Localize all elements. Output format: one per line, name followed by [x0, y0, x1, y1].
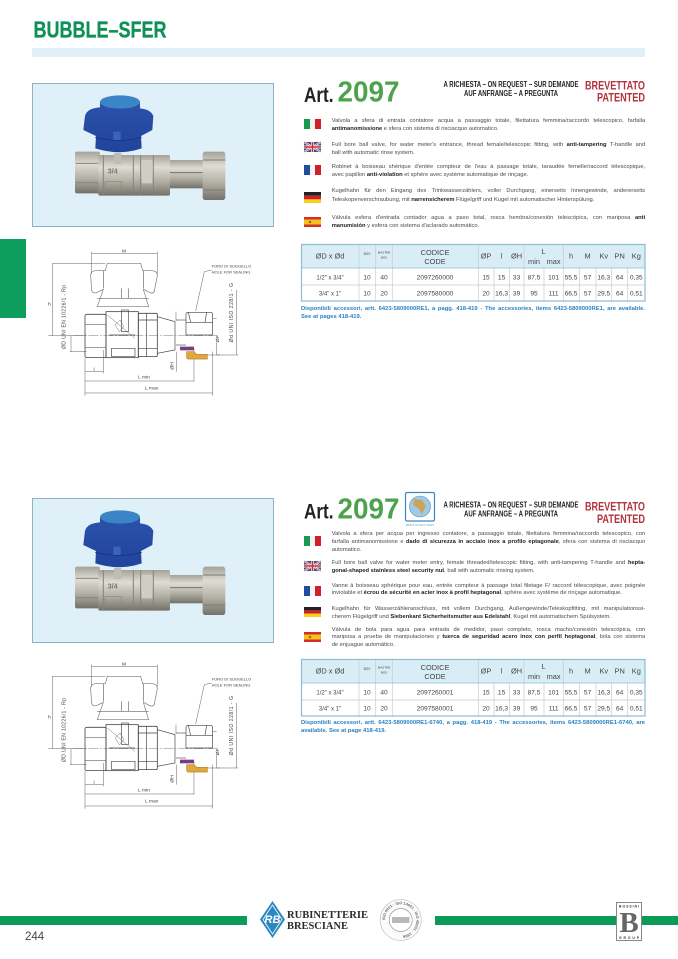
- technical drawing with dimensions: FORO DI SUGGELLO: [212, 263, 251, 268]
- table: dimensions and codes: 3/4" x 1": [319, 291, 341, 297]
- table: dimensions and codes: 55,5: [565, 689, 578, 696]
- text: Spanish description: Válvula esfera d'entrada contador agua a paso total, rosca hembra/conexión telescópica, con mariposa anti: [332, 215, 645, 221]
- text: Italian description: automatico.: [332, 547, 361, 553]
- table: dimensions and codes: 15: [498, 689, 506, 696]
- table: dimensions and codes: max: [547, 257, 561, 266]
- table: dimensions and codes: 0,35: [630, 274, 643, 281]
- description: German: [304, 188, 645, 203]
- icon: French flag: [304, 165, 321, 175]
- table: dimensions and codes: min: [528, 257, 540, 266]
- table: dimensions and codes: 66,5: [565, 705, 578, 712]
- technical drawing with dimensions: ØD UNI EN 10226/1 - Rp: [62, 285, 68, 349]
- panel: article 2097 standard: [32, 77, 646, 396]
- article heading with multi utility badge: AUF ANFRANGE – A PREGUNTA: [464, 510, 558, 518]
- table: dimensions and codes: L: [541, 662, 546, 671]
- table: dimensions and codes: 0,51: [630, 290, 643, 297]
- article heading: PATENTED: [597, 91, 645, 105]
- table: dimensions and codes: 95: [530, 290, 538, 297]
- text: French description: inviolable et écrou de sécurité en acier inox à profil heptagonal, sphère avec système de rinçage automatique.: [332, 590, 622, 596]
- table: dimensions and codes: h: [569, 666, 573, 676]
- technical drawing with dimensions: Ød UNI ISO 228/1 - G: [229, 696, 235, 755]
- table: dimensions and codes: 16,3: [495, 290, 508, 297]
- description: English: [304, 142, 645, 156]
- text: Spanish description: mariposa a prueba de manipulaciones y tuerca de seguridad acero inox con perfil heptagonal, bola con sistema: [332, 634, 645, 640]
- note: accessories: See at pages 418-419.: [301, 314, 361, 320]
- technical drawing with dimensions: L max: [145, 386, 159, 392]
- table: dimensions and codes: M: [585, 252, 591, 260]
- table: dimensions and codes: 20: [482, 705, 490, 712]
- technical drawing with dimensions: l: [93, 367, 95, 373]
- title: BUBBLE–SFER: [34, 16, 167, 42]
- description: Spanish: [304, 215, 645, 229]
- product photo: blue T-handle ball valve: 3/4: [108, 166, 119, 175]
- logo: Rubinetterie Bresciane: RB: [265, 914, 280, 926]
- technical drawing with dimensions: Ød UNI ISO 228/1 - G: [229, 283, 235, 342]
- table: dimensions and codes: 57: [584, 274, 592, 281]
- table: dimensions and codes: 3/4" x 1": [319, 706, 341, 712]
- note: accessories: available. See at page 418-419.: [301, 728, 386, 734]
- article heading: A RICHIESTA – ON REQUEST – SUR DEMANDE: [444, 80, 578, 89]
- icon: Italian flag: [304, 119, 321, 129]
- technical drawing with dimensions: ØP: [215, 334, 221, 342]
- footer: right green bar: [435, 916, 678, 925]
- text: German description: Kugelhahn für den Eingang des Trinkwasserzählers, voller Durchgang, einerseits Innengewinde, andererseits: [332, 188, 645, 194]
- table: dimensions and codes: 55,5: [565, 274, 578, 281]
- table: dimensions and codes: BOX: [381, 670, 387, 674]
- table: dimensions and codes: 10: [363, 705, 371, 712]
- table: dimensions and codes: BOX: [364, 252, 371, 256]
- icon: French flag: [304, 586, 321, 596]
- table: dimensions and codes: 2097260001: [417, 689, 454, 696]
- table: dimensions and codes: l: [501, 666, 503, 676]
- table: dimensions and codes: 16,3: [597, 274, 611, 281]
- article heading with multi utility badge: PATENTED: [597, 512, 645, 526]
- seal: ISO certification: ISO 9001 · ISO 14001 · ISO 45001 · 1996: [382, 902, 419, 938]
- description: Italian: [304, 531, 645, 553]
- article heading: BREVETTATO: [585, 78, 645, 92]
- text: Spanish description: Válvula de bola para agua para entrada de medidor, paso completo, rosca macho/conexión telescópica, con: [332, 627, 645, 633]
- icon: UK flag: [304, 560, 322, 572]
- text: German description: [332, 188, 645, 203]
- table: dimensions and codes: l: [501, 252, 503, 260]
- text: German description: Kugelhahn für Wasserzähleranschluss, mit vollem Durchgang, Außengewinde/Teleskopfitting, mit manipulationssi-: [332, 606, 645, 612]
- table: dimensions and codes: L: [541, 247, 546, 256]
- product photo: blue T-handle ball valve: [32, 498, 274, 643]
- text: Spanish description: [332, 627, 645, 649]
- table: dimensions and codes: PN: [615, 252, 625, 260]
- logo: Bossini Group: BOSSINI: [619, 904, 639, 908]
- table: dimensions and codes: BOX: [364, 667, 371, 671]
- table: dimensions and codes: 2097580000: [417, 290, 454, 297]
- text: Italian description: [332, 531, 645, 553]
- table: dimensions and codes: ØH: [511, 666, 522, 676]
- table: dimensions and codes: ØD x Ød: [316, 666, 344, 676]
- table: dimensions and codes: 10: [363, 274, 371, 281]
- table: dimensions and codes: 101: [548, 274, 559, 281]
- table: dimensions and codes: Kv: [599, 252, 608, 260]
- table: dimensions and codes: 111: [549, 705, 559, 712]
- technical drawing with dimensions: HOLE FOR SEALING: [212, 269, 250, 274]
- table: dimensions and codes: 10: [363, 689, 371, 696]
- logo: Rubinetterie Bresciane: RUBINETTERIE: [287, 910, 368, 921]
- table: dimensions and codes: ØD x Ød: [316, 252, 344, 260]
- technical drawing with dimensions: [48, 661, 251, 809]
- table: dimensions and codes: 1/2" x 3/4": [316, 275, 344, 281]
- table: dimensions and codes: CODE: [424, 257, 446, 266]
- article heading with multi utility badge: MULTI UTILITY ONLY: [406, 523, 434, 527]
- text: English description: Full bore ball valve, for water meter's entrance, thread female/telescopic fitting, with anti-tampering T-handle and: [332, 142, 645, 148]
- table: dimensions and codes: 57: [584, 290, 592, 297]
- table: dimensions and codes: 87,5: [528, 274, 541, 281]
- table: dimensions and codes: 20: [482, 290, 490, 297]
- table: dimensions and codes: 33: [513, 274, 521, 281]
- text: French description: Vanne à boisseau sphérique pour eau, entrée compteur à passage total filetage F/ raccord télescopique, avec poignée: [332, 582, 645, 588]
- panel: article 2097 with security nut: h: [48, 715, 51, 721]
- table: dimensions and codes: 0,51: [630, 705, 643, 712]
- text: English description: [332, 560, 645, 574]
- table: dimensions and codes: 15: [498, 274, 506, 281]
- text: English description: [332, 142, 645, 156]
- table: dimensions and codes: PN: [615, 666, 625, 676]
- article heading with multi utility badge: [304, 492, 645, 527]
- description: Spanish: [304, 627, 646, 648]
- technical drawing with dimensions: FORO DI SUGGELLO: [212, 676, 251, 681]
- table: dimensions and codes: 20: [380, 705, 388, 712]
- table: dimensions and codes: [300, 244, 646, 302]
- article heading with multi utility badge: A RICHIESTA – ON REQUEST – SUR DEMANDE: [444, 500, 578, 510]
- text: Italian description: antimanomissione e sfera con sistema di risciacquo automatico.: [332, 126, 499, 132]
- table: dimensions and codes: 66,5: [565, 290, 578, 297]
- text: Spanish description: manumisión y esfera con sistema d'aclarado automático.: [332, 223, 479, 229]
- page number: 244: [25, 931, 44, 943]
- table: dimensions and codes: [301, 659, 646, 717]
- logo: Bossini Group: GROUP: [619, 936, 640, 940]
- panel: article 2097 standard: h: [48, 302, 51, 308]
- text: English description: Full bore ball valve for water meter entry, female threaded/telescopic fitting, with anti-tampering T-handle and hepta-: [332, 560, 645, 566]
- table: dimensions and codes: ØH: [511, 252, 522, 260]
- description: German: [304, 606, 645, 620]
- technical drawing with dimensions: ØP: [215, 747, 221, 755]
- article heading: Art.: [304, 84, 334, 107]
- technical drawing with dimensions: L min: [138, 375, 150, 381]
- table: dimensions and codes: 16,3: [495, 705, 508, 712]
- technical drawing with dimensions: M: [122, 661, 126, 667]
- logo: Bossini Group: [616, 902, 642, 941]
- table: dimensions and codes: 29,5: [597, 290, 611, 297]
- header band: [32, 48, 645, 56]
- text: French description: [332, 164, 645, 178]
- article heading with multi utility badge: Art.: [304, 500, 334, 524]
- note: accessories: Disponibili accessori, artt. 6423-5809000RE1-6740, a pagg. 418-419 - The accessories, items 6423-5809000RE1-6740, are: [301, 720, 645, 726]
- table: dimensions and codes: max: [547, 672, 561, 681]
- table: dimensions and codes: CODICE: [421, 248, 449, 257]
- article heading with multi utility badge: BREVETTATO: [585, 499, 645, 513]
- table: dimensions and codes: 87,5: [528, 689, 541, 696]
- table: dimensions and codes: 64: [616, 290, 624, 297]
- technical drawing with dimensions: [48, 248, 251, 396]
- table: dimensions and codes: CODICE: [421, 663, 449, 672]
- technical drawing with dimensions: L min: [138, 788, 150, 794]
- text: English description: ball with automatic rinse system.: [332, 150, 414, 156]
- table: dimensions and codes: 111: [549, 290, 559, 297]
- table: dimensions and codes: 40: [380, 689, 388, 696]
- note: accessories: Disponibili accessori, artt. 6423-5809000RE1, a pagg. 418-419 - The accessories, items 6423-5809000RE1, are available.: [301, 306, 645, 312]
- note: accessories: [301, 306, 645, 320]
- table: dimensions and codes: M: [585, 666, 591, 676]
- logo: Rubinetterie Bresciane: [258, 899, 370, 940]
- article heading: AUF ANFRANGE – A PREGUNTA: [464, 89, 558, 98]
- table: dimensions and codes: 29,5: [597, 705, 611, 712]
- article heading: 2097: [338, 77, 400, 109]
- table: dimensions and codes: h: [569, 252, 573, 260]
- technical drawing with dimensions: ØH: [170, 362, 176, 370]
- description: Italian: [304, 118, 646, 132]
- table: dimensions and codes: 64: [616, 274, 624, 281]
- technical drawing with dimensions: ØD UNI EN 10226/1 - Rp: [62, 698, 68, 762]
- icon: German flag: [304, 192, 321, 203]
- technical drawing with dimensions: M: [122, 248, 126, 254]
- table: dimensions and codes: 15: [482, 274, 490, 281]
- text: Italian description: Valvola a sfera per acqua per ingresso contatore, a passaggio totale, filettatura femmina/raccordo telescopico, con: [332, 531, 645, 537]
- table: dimensions and codes: ØP: [481, 252, 491, 260]
- text: Spanish description: de enjuague automático.: [332, 642, 395, 648]
- product photo: blue T-handle ball valve: [32, 83, 274, 227]
- note: accessories: [301, 718, 645, 736]
- panel: article 2097 with security nut: [32, 492, 646, 809]
- table: dimensions and codes: 16,3: [597, 689, 611, 696]
- description: French: [304, 582, 645, 596]
- text: French description: avec papillon anti-violation et sphère avec système automatique de rinçage.: [332, 172, 528, 178]
- article heading with multi utility badge: 2097: [338, 494, 400, 526]
- text: Italian description: farfalla antimanomissione e dado di sicurezza in acciaio inox a profilo eptagonale, sfera con sistema di risciacquo: [332, 539, 645, 545]
- table: dimensions and codes: MASTER: [378, 666, 391, 670]
- table: dimensions and codes: 2097260000: [417, 274, 454, 281]
- icon: German flag: [304, 607, 321, 617]
- technical drawing with dimensions: HOLE FOR SEALING: [212, 682, 250, 687]
- logo: Bossini Group: B: [619, 907, 639, 939]
- table: dimensions and codes: 95: [530, 705, 538, 712]
- table: dimensions and codes: 64: [616, 689, 624, 696]
- text: French description: Robinet à boisseau shérique d'entée compteur de l'eau à passage totale, taraudée femelle/raccord télescopique,: [332, 164, 645, 170]
- text: Spanish description: [332, 215, 645, 229]
- table: dimensions and codes: Kg: [632, 666, 641, 676]
- table: dimensions and codes: 101: [548, 689, 559, 696]
- table: dimensions and codes: 2097580001: [417, 705, 454, 712]
- table: dimensions and codes: 33: [513, 689, 521, 696]
- text: Italian description: Valvola a sfera di entrata contatore acqua a passaggio totale, filettatura femmina/raccordo telescopico, farfalla: [332, 118, 645, 124]
- green side tab: [0, 239, 26, 318]
- table: dimensions and codes: 15: [482, 689, 490, 696]
- article heading: [304, 77, 645, 109]
- product photo: blue T-handle ball valve: 3/4: [108, 581, 119, 590]
- technical drawing with dimensions: L max: [145, 799, 159, 805]
- table: dimensions and codes: CODE: [424, 672, 446, 681]
- icon: UK flag: [304, 142, 322, 152]
- logo: Rubinetterie Bresciane: BRESCIANE: [287, 921, 348, 932]
- table: dimensions and codes: BOX: [381, 256, 387, 260]
- table: dimensions and codes: 1/2" x 3/4": [316, 690, 344, 696]
- text: Italian description: [332, 118, 646, 132]
- table: dimensions and codes: 0,35: [630, 689, 643, 696]
- text: German description: [332, 606, 645, 620]
- text: German description: Teleskopenverschraubung, mit narrensicherem Flügelgriff und Kugel mit automatischer Hinterspülung.: [332, 197, 594, 203]
- table: dimensions and codes: ØP: [481, 666, 491, 676]
- table: dimensions and codes: min: [528, 672, 540, 681]
- technical drawing with dimensions: ØH: [170, 775, 176, 783]
- icon: Spanish flag: [304, 632, 321, 642]
- footer: left green bar: [0, 916, 247, 925]
- description: English: [304, 560, 645, 574]
- technical drawing with dimensions: l: [93, 780, 95, 786]
- text: German description: cherem Flügelgriff und Siebenkant Sicherheitsmutter aus Edelstahl, Kugel mit automatischem Spülsystem.: [332, 614, 611, 620]
- icon: Italian flag: [304, 536, 321, 546]
- table: dimensions and codes: 57: [584, 705, 592, 712]
- table: dimensions and codes: 64: [616, 705, 624, 712]
- table: dimensions and codes: 20: [380, 290, 388, 297]
- table: dimensions and codes: Kv: [599, 666, 608, 676]
- table: dimensions and codes: 40: [380, 274, 388, 281]
- icon: Spanish flag: [304, 217, 321, 227]
- text: English description: gonal-shaped stainless steel security nut, ball with automatic rinsing system.: [332, 568, 535, 574]
- text: French description: [332, 582, 645, 596]
- table: dimensions and codes: Kg: [632, 252, 641, 260]
- description: French: [304, 164, 645, 178]
- table: dimensions and codes: 10: [363, 290, 371, 297]
- table: dimensions and codes: 39: [513, 290, 521, 297]
- table: dimensions and codes: 39: [513, 705, 521, 712]
- table: dimensions and codes: 57: [584, 689, 592, 696]
- table: dimensions and codes: MASTER: [378, 250, 391, 254]
